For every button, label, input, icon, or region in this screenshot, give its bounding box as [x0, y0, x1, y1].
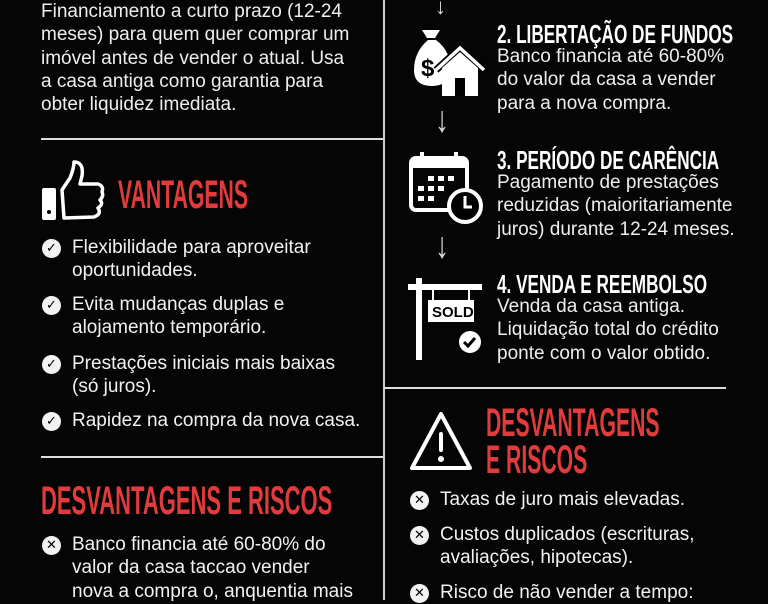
step 2: do valor da casa a vender — [497, 69, 716, 90]
intro text: imóvel antes de vender o atual. Usa — [41, 48, 344, 69]
vertical divider — [383, 0, 385, 600]
icon: calendar clock — [409, 152, 483, 224]
list: desvantagens right: Taxas de juro mais elevadas. — [440, 489, 685, 510]
arrow 3: ↓ — [435, 225, 449, 266]
step 3: reduzidas (maioritariamente — [497, 195, 732, 216]
list: vantagens: ✓ — [46, 298, 57, 313]
list: desvantagens right: ✕ — [414, 586, 425, 601]
icon: money house — [414, 30, 486, 96]
list: vantagens: Prestações iniciais mais baixas — [72, 353, 335, 374]
step 2 — [497, 19, 733, 114]
list: desvantagens right: Custos duplicados (escrituras, — [440, 524, 694, 545]
heading: desvantagens right: E RISCOS — [486, 438, 587, 482]
list: desvantagens right: avaliações, hipotecas). — [440, 547, 633, 568]
list: desvantagens left: Banco financia até 60-80% do — [72, 534, 326, 555]
step 2: 2. LIBERTAÇÃO DE FUNDOS — [497, 19, 733, 49]
intro text — [41, 1, 349, 115]
intro text: Financiamento a curto prazo (12-24 — [41, 1, 342, 22]
step 4 — [497, 269, 719, 364]
list: vantagens: alojamento temporário. — [72, 317, 266, 338]
list: vantagens: Flexibilidade para aproveitar — [72, 237, 311, 258]
icon: thumbs up — [42, 160, 104, 220]
list: desvantagens right: ✕ — [414, 528, 425, 543]
list: vantagens: ✓ — [46, 414, 57, 429]
intro text: meses) para quem quer comprar um — [41, 24, 349, 45]
arrow 2: ↓ — [435, 99, 449, 140]
heading: vantagens: VANTAGENS — [118, 173, 248, 217]
list: vantagens: ✓ — [46, 357, 57, 372]
heading: desvantagens right — [486, 401, 660, 482]
step 4: ponte com o valor obtido. — [497, 343, 710, 364]
intro text: obter liquidez imediata. — [41, 94, 236, 115]
step 3: 3. PERÍODO DE CARÊNCIA — [497, 145, 719, 175]
list: desvantagens right: Risco de não vender a tempo: — [440, 582, 694, 603]
step 4: 4. VENDA E REEMBOLSO — [497, 269, 707, 299]
step 3: Pagamento de prestações — [497, 172, 719, 193]
step 2: para a nova compra. — [497, 93, 671, 114]
list: desvantagens left: nova a compra o, anquentia mais — [72, 581, 353, 602]
list: vantagens: (só juros). — [72, 376, 156, 397]
list: vantagens: oportunidades. — [72, 260, 198, 281]
step 2: Banco financia até 60-80% — [497, 46, 724, 67]
icon: sold sign: SOLD — [432, 304, 474, 321]
list: desvantagens right: ✕ — [414, 493, 425, 508]
heading: desvantagens left: DESVANTAGENS E RISCOS — [41, 479, 332, 523]
list: vantagens: Rapidez na compra da nova casa. — [72, 410, 360, 431]
list: vantagens: Evita mudanças duplas e — [72, 294, 284, 315]
list: vantagens — [42, 237, 360, 431]
list: vantagens: ✓ — [46, 241, 57, 256]
icon: money house: $ — [421, 55, 435, 82]
step 3 — [496, 145, 735, 240]
list: desvantagens left — [42, 534, 353, 602]
list: desvantagens right — [410, 489, 694, 603]
heading: desvantagens right: DESVANTAGENS — [486, 401, 660, 445]
intro text: a casa antiga como garantia para — [41, 71, 323, 92]
list: desvantagens left: valor da casa taccao vender — [72, 557, 310, 578]
step 4: Venda da casa antiga. — [497, 296, 685, 317]
icon: warning — [410, 412, 472, 470]
icon: sold sign — [408, 278, 482, 360]
step 4: Liquidação total do crédito — [497, 319, 719, 340]
list: desvantagens left: ✕ — [46, 538, 57, 553]
step 3: juros) durante 12-24 meses. — [497, 219, 735, 240]
